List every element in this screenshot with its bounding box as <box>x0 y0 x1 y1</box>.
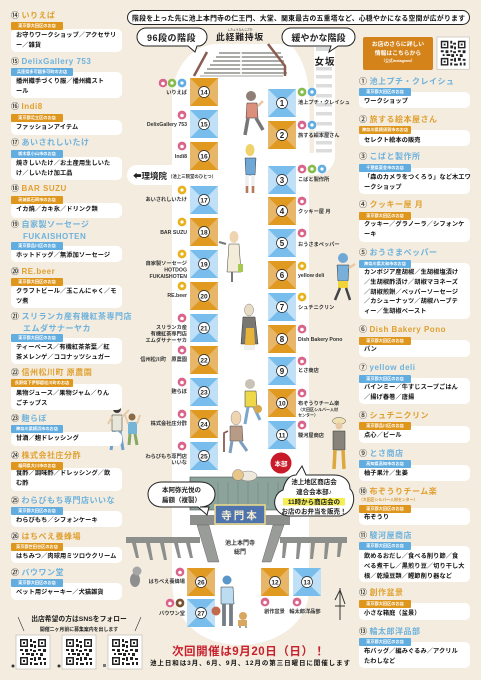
map labels: left shops: FUKAISHOTEN <box>150 274 187 280</box>
tile 14 <box>190 78 218 106</box>
shop 19: 東京都品川区のお店 <box>18 243 56 248</box>
shop 22: ごチップス <box>16 400 47 407</box>
map labels: right shops: こばと製作所 <box>298 175 330 183</box>
shop 4: ーキ <box>364 231 377 238</box>
label: Rikyoin <box>133 171 216 181</box>
map labels: left shops: 有機紅茶専門店 <box>151 330 187 338</box>
shop 1 <box>359 77 470 108</box>
shop 8: 点心／ビール <box>364 432 402 439</box>
callout: intro sentence: 階段を上った先に池上本門寺の仁王門、大堂、関東最古の五重塔など、心穏やかになる空間が広がります <box>132 13 465 22</box>
tile 1 <box>268 89 296 117</box>
callout: intro sentence <box>128 10 470 24</box>
shop 12: 小さな箱庭（盆景） <box>364 610 421 617</box>
shop 10: 東京都大田区のお店 <box>366 506 404 511</box>
shop 9 <box>359 449 470 481</box>
tile 5: 5 <box>280 239 285 248</box>
map labels: left shops: DelixGallery 753 <box>147 122 187 128</box>
shop 13: ⑬輪太郎洋品部 <box>359 627 420 636</box>
shop 2: セレクト絵本の販売 <box>364 137 421 144</box>
shop 11: べる煮干し／黒煎り豆／切り干し大 <box>364 563 465 570</box>
map labels: left shops: Indi8 <box>175 154 187 160</box>
gate plaque <box>215 505 265 524</box>
shop 4: ④クッキー屋 月 <box>359 200 423 209</box>
map labels: left shops: BAR SUZU <box>160 230 187 236</box>
tile 11 <box>268 421 296 449</box>
shop 3: ③こばと製作所 <box>359 152 420 161</box>
shop 21: ㉑スリランカ産有機紅茶専門店 <box>11 312 132 321</box>
shop 25: 東京都大田区のお店 <box>18 508 56 513</box>
shop 3: ークショップ <box>364 184 402 191</box>
panel: more info by Instagram: （公式Instagram） <box>381 59 415 63</box>
tile 10: 10 <box>278 400 286 408</box>
tile 22 <box>190 346 218 374</box>
tile 8 <box>268 325 296 353</box>
map labels: left shops <box>140 88 188 617</box>
callout: replica plaque: 本阿弥光悦の <box>162 485 202 494</box>
label: Ikegami Honmonji Sanmon: 総門 <box>234 548 246 556</box>
shop 11: 東京都大田区のお店 <box>366 543 404 548</box>
map labels: left shops: いいな <box>171 459 187 466</box>
shop 10: 布ぞうり <box>364 514 389 521</box>
shop 14: ⑭いりえば <box>11 11 56 20</box>
shop 18: 茨城県石岡市のお店 <box>18 197 56 202</box>
left tiles <box>190 78 218 470</box>
tile 3 <box>268 166 296 194</box>
panel: more info by Instagram: お店のさらに詳しい <box>372 42 424 48</box>
map labels: right shops: 池上プチ・クレイシュ <box>298 98 350 106</box>
map labels: left shops: いりえば <box>166 88 188 96</box>
tile 20: 20 <box>200 294 208 300</box>
figure: cat on gate <box>232 470 257 481</box>
shop 5: ／生胡椒酢漬け／胡椒マヨネーズ <box>364 279 458 286</box>
tile 9: 9 <box>280 367 285 376</box>
shop 18: イカ焼／カキ氷／ドリンク類 <box>16 206 98 213</box>
shop 21: エムダサナーヤカ <box>23 324 91 332</box>
QR code: Instagram <box>437 37 469 69</box>
shop 19: FUKAISHOTEN <box>23 232 86 241</box>
panel: more info by Instagram: 情報はこちらから <box>375 50 421 56</box>
road: white street area <box>172 42 335 645</box>
shop 13 <box>359 627 470 668</box>
gate fences <box>126 537 347 560</box>
shop 15 <box>11 57 122 98</box>
figure: elderly man with cane <box>224 411 247 453</box>
figure: man walking dog <box>212 576 247 628</box>
footer: schedule note: 池上日和は3月、6月、9月、12月の第三日曜日に開催します <box>150 658 350 667</box>
map labels: right shops: センター） <box>298 412 318 418</box>
icons: category markers <box>158 78 327 608</box>
map labels: right shops: クッキー屋 月 <box>298 207 331 215</box>
shop 7 <box>359 363 470 404</box>
shop 24: ㉔株式会社庄分酢 <box>11 451 81 460</box>
shop 5: ／胡椒煎餅／ペッパーソーセージ <box>364 289 458 296</box>
shop 17: ⑰あいされしいたけ <box>11 138 90 147</box>
heading: Kyonanjizaka <box>216 28 264 42</box>
callout: gentle stairs: 緩やかな階段 <box>291 32 346 43</box>
tile 25 <box>190 442 218 470</box>
shop 14: 東京都大田区のお店 <box>18 23 56 28</box>
tile 22: 22 <box>200 358 208 364</box>
stairs: onna-zaka gentle stairs <box>316 47 332 152</box>
gate pillars <box>197 525 219 562</box>
callout: 96 steps <box>137 28 207 52</box>
shop 16: 東京都足立区のお店 <box>18 115 56 120</box>
tile 21 <box>190 314 218 342</box>
shop 10: ⑩布ぞうりチーム楽 <box>359 487 437 496</box>
shop 21: ティーベース／有機紅茶茶葉／紅 <box>16 344 110 351</box>
callout: headquarters notice: お店のお弁当を販売！ <box>282 506 346 516</box>
shop 6 <box>359 325 470 357</box>
map labels: left shops: あいされしいたけ <box>145 195 187 203</box>
shop 13: 東京都大田区のお店 <box>366 639 404 644</box>
shop 11: ⑪駿河屋商店 <box>359 531 412 540</box>
heading: onna-zaka: 女坂 <box>314 56 336 68</box>
map labels: right shops: シュチニクリン <box>298 303 334 311</box>
figure: walking person in pink shirt <box>245 91 263 135</box>
shop 2: 神奈川県横須賀市のお店 <box>362 127 408 132</box>
badge: headquarters <box>270 452 292 474</box>
tile 8: 8 <box>280 335 285 344</box>
tile 20 <box>190 282 218 310</box>
gate beam <box>190 515 290 525</box>
shop 23 <box>11 414 122 446</box>
shop 21 <box>11 312 132 364</box>
tile 6 <box>268 261 296 289</box>
shop 22: ㉒信州松川町 原農園 <box>11 368 92 377</box>
shop 17 <box>11 138 122 180</box>
shop 6: 東京都大田区のお店 <box>366 338 404 343</box>
shop 27: ペット用ジャーキー／犬猫雑貨 <box>16 589 104 596</box>
callout: 96 steps: 96段の階段 <box>147 32 196 43</box>
shop 3: 千葉県東金市のお店 <box>366 165 404 170</box>
map labels: left shops: 自家製ソーセージ <box>146 259 187 267</box>
map labels: right shops: 輪太郎洋品部 <box>289 607 321 615</box>
heading: SNS follow: 開催二ヶ月前に募集案内を出します <box>40 626 118 633</box>
shop 4 <box>359 200 470 242</box>
shop 18 <box>11 184 122 218</box>
map labels: right shops: 布ぞうりチーム楽 <box>298 399 340 407</box>
shop 14 <box>11 11 122 52</box>
shop 24 <box>11 451 122 491</box>
tile 23 <box>190 378 218 406</box>
shop 4: 東京都大田区のお店 <box>366 213 404 218</box>
shop 20: ツ煮 <box>16 298 29 305</box>
tile 6: 6 <box>280 271 285 280</box>
shop 22: 長野県下伊那郡松川町のお店 <box>15 380 69 385</box>
callout: replica plaque: 扁額（複製） <box>162 495 201 504</box>
panel: more info by Instagram <box>363 37 433 70</box>
tile 24: 24 <box>200 422 208 428</box>
shop 25 <box>11 496 122 527</box>
shop 5 <box>359 248 470 319</box>
shop 5: カンボジア産胡椒／生胡椒塩漬け <box>364 269 458 276</box>
label: Ikegami Honmonji Sanmon <box>225 539 255 556</box>
tile 21: 21 <box>200 326 208 332</box>
figure: man with blue cap <box>335 253 355 300</box>
figure: person in blue shirt <box>245 144 256 193</box>
shop 7: ⑦yellow deli <box>359 363 415 372</box>
shop 23: ㉓麹らぼ <box>11 414 47 423</box>
map labels: right shops: Dish Bakery Pono <box>298 337 342 343</box>
gate: Sanmon gate: 寺門本 <box>221 509 259 522</box>
shop 2 <box>359 115 470 146</box>
figure: man with straw hat <box>332 418 346 469</box>
shop 19 <box>11 220 122 262</box>
tile 23: 23 <box>200 390 208 396</box>
shop 9: ⑨とさ商店 <box>359 449 404 458</box>
tile 1: 1 <box>280 99 285 108</box>
shop 20: ⑳RE.beer <box>11 267 55 276</box>
figure: elderly woman in yellow <box>245 379 262 424</box>
stairs: 96-step stairs <box>194 44 287 76</box>
callout: headquarters notice: 11時から商店会の <box>288 497 341 506</box>
shop 9: 高知県高知市のお店 <box>366 461 404 466</box>
shop 11 <box>359 531 470 582</box>
shop 15: ール <box>16 88 29 95</box>
shop 1: 東京都大田区のお店 <box>366 89 404 94</box>
shop 2: ②旅する絵本屋さん <box>359 115 438 124</box>
shop 22: 果物ジュース／果物ジャム／りん <box>16 390 109 397</box>
gate roof <box>190 477 295 510</box>
shop 13: 布バッグ／編みぐるみ／アクリル <box>364 648 458 655</box>
shop 6: パン <box>364 346 377 353</box>
shop 13: たわしなど <box>364 658 395 665</box>
shop 3: 「森のカメラをつくろう」など木工ワ <box>364 174 471 181</box>
tile 13: 13 <box>303 580 311 586</box>
tile 18 <box>190 218 218 246</box>
shop 4: クッキー／グラノーラ／シフォンケ <box>364 221 464 228</box>
shop 12: ⑫創作盆景 <box>359 588 404 597</box>
callout: headquarters notice <box>275 466 354 516</box>
map labels: left shops: バウワン堂 <box>159 609 185 617</box>
tile 15 <box>190 110 218 138</box>
shop 26 <box>11 532 122 563</box>
shop 26: 東京都世田谷区のお店 <box>16 544 58 549</box>
shop 23: 甘酒／麹ドレッシング <box>16 435 79 442</box>
tile 12: 12 <box>271 580 279 586</box>
tile 19: 19 <box>200 262 208 268</box>
shop 15: 播州織手づくり服／播州織スト <box>16 78 104 85</box>
tile 7 <box>268 293 296 321</box>
tile 11: 11 <box>279 432 286 440</box>
shop 25: ㉕わらびもち専門店いいな <box>11 496 115 505</box>
map labels: left shops: RE.beer <box>167 293 187 299</box>
shop 17: 栃木県小山市のお店 <box>18 151 56 156</box>
gate: Sanmon gate <box>126 477 347 562</box>
callout: headquarters notice: 池上地区商店会 <box>291 477 337 486</box>
figure: woman in white dress <box>219 231 243 282</box>
shop 21: 茶メレンゲ／ココナッツシュガー <box>16 354 110 361</box>
map labels: right shops <box>264 98 350 615</box>
shop 17: 焼きしいたけ／お土産用生しいた <box>16 160 110 167</box>
tile 16 <box>190 142 218 170</box>
tile 15: 15 <box>200 122 208 128</box>
shop 12: 東京都大田区のお店 <box>366 601 404 606</box>
shop 7: バインミー／牛すじスープごはん <box>364 384 458 391</box>
map labels: left shops: スリランカ産 <box>156 323 187 331</box>
shop 22 <box>11 368 122 410</box>
shop 14: お守りワークショップ／アクセサリ <box>16 32 116 39</box>
label: Rikyoin: ⬅理境院 <box>133 171 168 181</box>
shop 27: 東京都大田区のお店 <box>18 580 56 585</box>
heading: Kyonanjizaka: しきょうなんじざか <box>227 28 253 32</box>
shop 15: ⑮DelixGallery 753 <box>11 57 91 66</box>
shop 16: ファッションアイテム <box>16 124 78 131</box>
map labels: right shops: おうさまペッパー <box>298 241 340 248</box>
tile 24 <box>190 410 218 438</box>
shop 8: 東京都品川区のお店 <box>366 423 404 428</box>
map labels: right shops: 駿河屋商店 <box>298 431 324 439</box>
map labels: left shops: 株式会社庄分酢 <box>151 419 188 427</box>
QR codes: SNS <box>12 635 142 669</box>
left tab path to Rikyoin <box>127 165 174 185</box>
shop 9: 柚子果汁／生姜 <box>364 470 408 477</box>
tile 14: 14 <box>200 90 208 96</box>
shop 25: わらびもち／シフォンケーキ <box>16 517 98 524</box>
map labels: left shops: 信州松川町 原農園 <box>140 355 187 363</box>
tile 5 <box>268 229 296 257</box>
tile 2 <box>268 121 296 149</box>
label: Rikyoin: （池上三院堂のひとつ） <box>168 173 216 180</box>
shop 5: ／カシューナッツ／胡椒ハーブテ <box>364 298 458 305</box>
tile 7: 7 <box>280 303 285 312</box>
shop 24: 福岡県大川市のお店 <box>18 463 56 468</box>
map labels: right shops: 旅する絵本屋さん <box>298 131 340 139</box>
map labels: left shops: HOTDOG <box>164 268 187 274</box>
map labels: right shops: （大田区シルバー人材 <box>298 406 338 412</box>
tile 25: 25 <box>200 454 208 460</box>
map labels: right shops: とさ商店 <box>298 366 319 374</box>
map labels: left shops: エムダサナーヤカ <box>145 336 187 344</box>
shop 16 <box>11 102 122 135</box>
tile 17: 17 <box>200 198 208 204</box>
shop 6: ⑥Dish Bakery Pono <box>359 325 446 334</box>
tile 19 <box>190 250 218 278</box>
shop 10: （大田区シルバー人材センター） <box>359 497 417 502</box>
shop 17: け／しいたけ加工品 <box>16 170 73 177</box>
shop 20: 東京都大田区のお店 <box>18 279 56 284</box>
tile 3: 3 <box>280 176 285 185</box>
shop 11: 根／乾燥豆類／鰹節削り器など <box>364 573 452 580</box>
shop 10 <box>359 487 470 525</box>
shop 7: 東京都大田区のお店 <box>366 376 404 381</box>
tile 10 <box>268 389 296 417</box>
compass: north mark <box>335 588 345 620</box>
shop 18: ⑱BAR SUZU <box>11 184 67 193</box>
tile 4 <box>268 197 296 225</box>
shop 8: ⑧シュチニクリン <box>359 411 429 420</box>
figure: monk <box>241 304 258 350</box>
heading: SNS follow <box>18 614 141 633</box>
tile 4: 4 <box>280 207 285 216</box>
heading: Kyonanjizaka: 此経難持坂 <box>216 31 264 42</box>
shop 26: ㉖はちべえ養蜂場 <box>11 532 81 541</box>
map labels: right shops: yellow deli <box>298 273 325 279</box>
map labels: left shops: はちべえ養蜂場 <box>149 577 186 585</box>
callout: replica plaque <box>148 482 215 515</box>
shop 19: ホットドッグ／無添加ソーセージ <box>16 252 110 259</box>
map labels: right shops: 創作盆景 <box>264 607 285 615</box>
shop 19: ⑲自家製ソーセージ <box>11 220 89 229</box>
tile 18: 18 <box>200 230 208 236</box>
shop 1: ①池上プチ・クレイシュ <box>359 77 454 86</box>
shop 14: ー／雑貨 <box>16 42 41 49</box>
tile 26: 26 <box>197 580 205 586</box>
tile 27: 27 <box>197 610 205 618</box>
tile 2: 2 <box>280 131 285 140</box>
shop 23: 神奈川県横浜市のお店 <box>16 426 58 431</box>
shop 5: ⑤おうさまペッパー <box>359 248 438 257</box>
shop 5: ィー／生胡椒ペースト <box>364 308 427 315</box>
shop 24: 食酢／調味酢／ドレッシング／飲 <box>16 470 110 477</box>
bottom tiles <box>187 568 321 627</box>
badge: headquarters: 本部 <box>274 459 288 468</box>
shop 20: クラフトビール／玉こんにゃく／モ <box>16 288 117 295</box>
shop 1: ワークショップ <box>364 98 408 105</box>
heading: SNS follow: 出店希望の方はSNSをフォロー <box>31 614 127 623</box>
tile 17 <box>190 186 218 214</box>
tile 9 <box>268 357 296 385</box>
callout: gentle stairs <box>282 28 355 52</box>
shop 5: 神奈川県大和市のお店 <box>364 261 406 266</box>
shop 16: ⑯Indi8 <box>11 102 43 111</box>
shop 15: 兵庫県多可郡多可町のお店 <box>17 69 67 74</box>
shop 26: はちみつ／肉球用ミツロウクリーム <box>16 553 116 560</box>
map labels: left shops: 麹らぼ <box>171 387 188 395</box>
tile 16: 16 <box>200 154 208 160</box>
figure: two children <box>108 405 140 450</box>
shop 11: 飲めるおだし／食べる削り節／食 <box>364 553 458 560</box>
shop 12 <box>359 588 470 620</box>
shop 3 <box>359 152 471 194</box>
shop 8 <box>359 411 470 443</box>
label: Ikegami Honmonji Sanmon: 池上本門寺 <box>225 539 255 547</box>
map labels: left shops: わらびもち専門店 <box>145 452 187 460</box>
footer: next event date: 次回開催は9月20日（日）！ <box>172 644 325 658</box>
shop 27: ㉗バウワン堂 <box>11 568 64 577</box>
right tiles <box>268 89 296 449</box>
shop 24: む酢 <box>16 480 29 487</box>
figure: cat <box>130 566 142 587</box>
shop 27 <box>11 568 122 600</box>
callout: headquarters notice: 連合会本部♪ <box>296 487 332 496</box>
shop 7: ／揚げ春巻／唐揚 <box>364 394 414 401</box>
shop 20 <box>11 267 122 308</box>
shop 21: 東京都大田区のお店 <box>18 335 56 340</box>
